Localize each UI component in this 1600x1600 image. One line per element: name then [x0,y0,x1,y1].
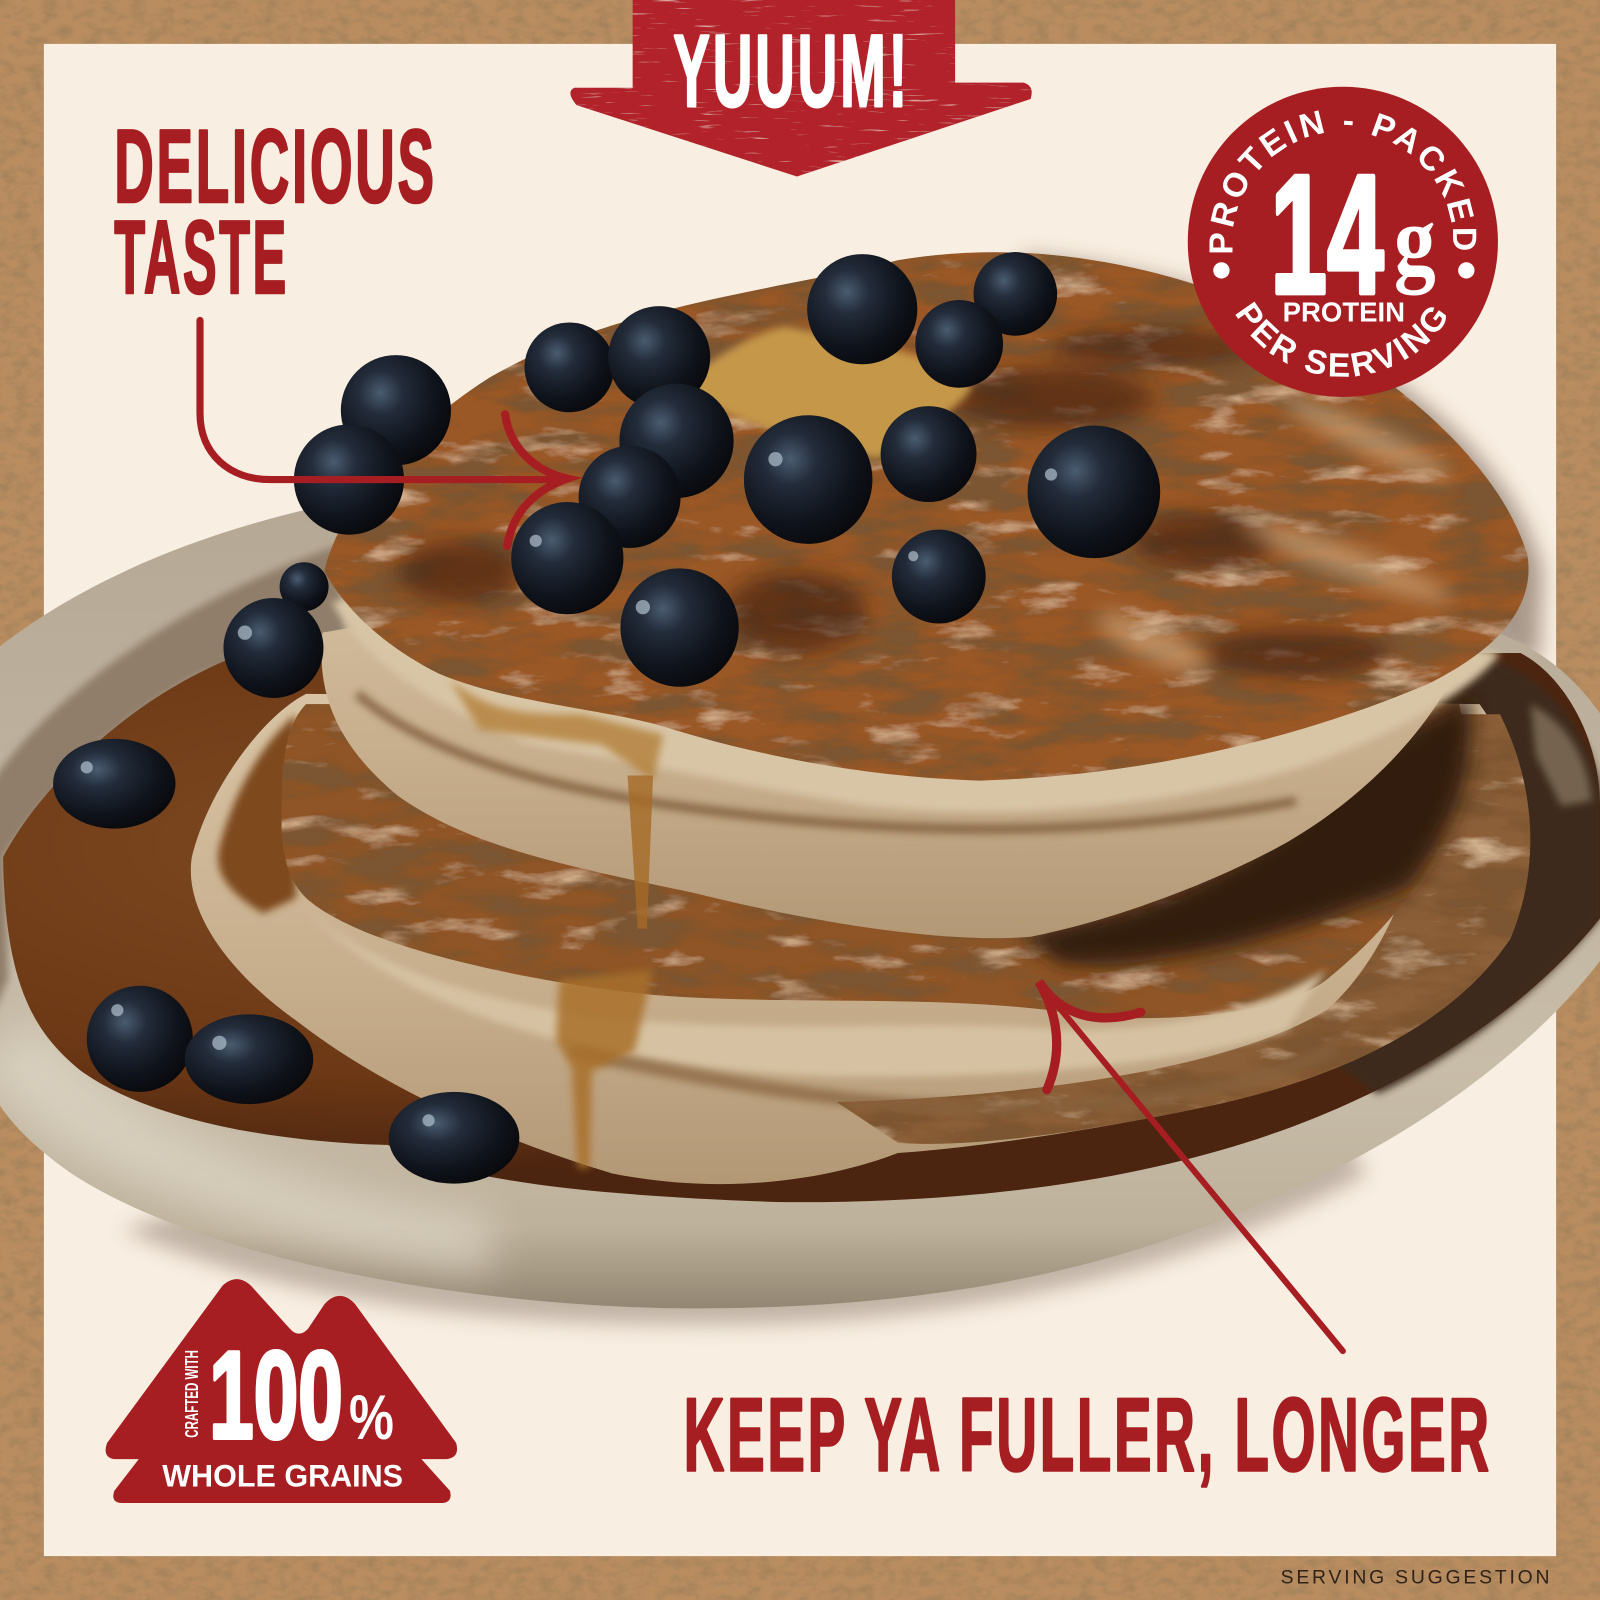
butter pat [679,327,971,459]
top pancake surface [324,252,1528,781]
pancake shadow [1020,255,1543,663]
top pancake light patches [1091,387,1457,684]
heading: delicious taste: DELICIOUS [114,109,437,225]
badge dots [1213,262,1474,279]
plate right interior [1276,653,1600,1094]
lower pancake side [191,694,1527,1184]
arrow to pancake layers [1039,982,1343,1351]
plate shadow [122,1122,1367,1325]
protein badge [1188,86,1498,397]
100: 100 [209,1326,343,1465]
heading: delicious taste [114,109,437,316]
badge protein label: PROTEIN [1283,296,1405,327]
lower pancake top [282,704,1464,1018]
lower pancake seam [571,1046,1337,1108]
blueberries [53,252,1160,1184]
pancake photo [0,252,1600,1325]
middle pancakes side [321,510,1469,938]
protein badge: g [1394,184,1436,295]
syrup run over top edge [449,679,663,781]
mountain shape [106,1279,457,1503]
syrup pool [3,653,1600,1202]
percent: % [349,1383,394,1453]
blueberry highlights [81,452,1057,1127]
yuuum banner arrow [570,0,1032,177]
top pancake side [332,571,1500,812]
serving suggestion note: SERVING SUGGESTION [1281,1567,1551,1589]
syrup drip lower [556,969,653,1168]
lower pancake dark right zone [1020,694,1471,965]
plate right highlight [1531,704,1592,806]
arrow to blueberries [200,320,567,546]
banner text: YUUUM! [673,14,910,128]
syrup drip upper [628,776,653,929]
plate front highlight [0,1020,490,1273]
crafted with: CRAFTED WITH [181,1350,202,1438]
badge bottom arc text: PER SERVING [1235,302,1446,377]
badge top arc text: PROTEIN - PACKED [1210,110,1476,252]
plate [0,505,1600,1308]
top pancake dark patches [398,329,1388,678]
whole grains badge [106,1279,457,1503]
lower pancake browned left edge [218,714,296,913]
banner shape [570,0,1032,177]
plate inner wall [0,546,347,1020]
lower pancake pale lip [296,898,1327,1077]
middle pancake seam [357,694,1296,829]
lower pancake right mottled side [837,714,1530,1144]
heading: delicious taste: TASTE [114,200,289,316]
badge grams: 14 [1270,140,1384,329]
badge circle [1188,87,1498,397]
whole grains: WHOLE GRAINS [162,1458,403,1494]
